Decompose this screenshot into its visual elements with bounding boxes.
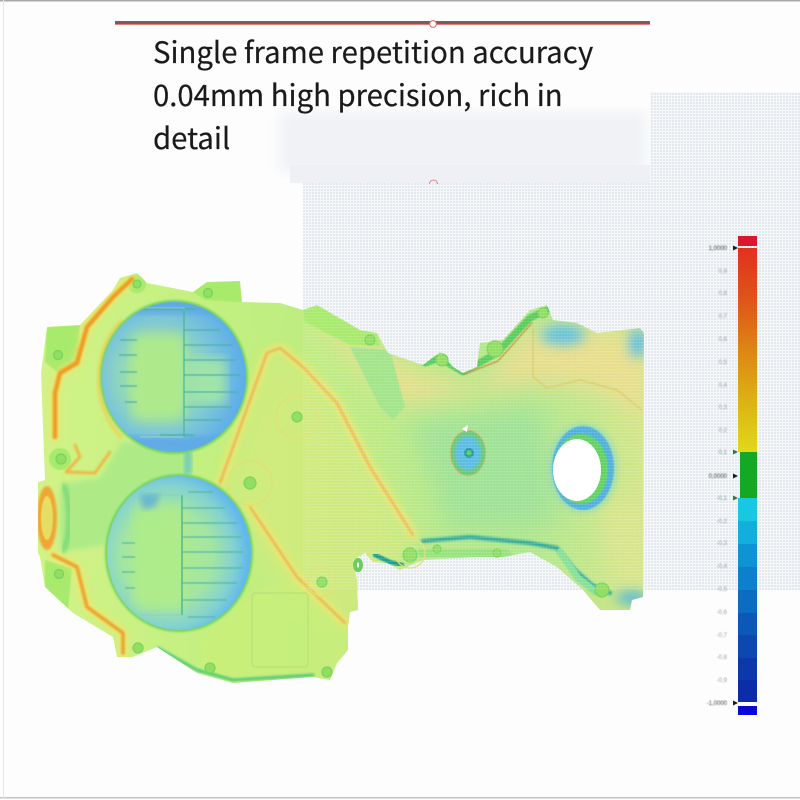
small through hole [355, 560, 361, 570]
legend scale labels: -0,8 [717, 655, 728, 661]
legend scale labels: 0,1 [719, 450, 728, 456]
outlet tube [60, 442, 192, 552]
legend scale labels: -0,4 [717, 564, 728, 570]
legend scale labels: 0,7 [719, 314, 728, 320]
orange ridges [53, 279, 642, 680]
color scale legend [707, 236, 757, 715]
legend scale labels: 0,4 [719, 383, 728, 389]
legend scale labels: -0,3 [717, 541, 728, 547]
background dot grid [303, 92, 800, 590]
legend bar [738, 236, 757, 715]
legend scale labels: 0,8 [719, 291, 728, 297]
small red arc marker [430, 180, 438, 184]
legend scale labels: -0,2 [717, 519, 728, 525]
legend scale labels: -0,9 [717, 678, 728, 684]
legend scale labels: 0,9 [719, 269, 728, 275]
lower circular dome [105, 474, 253, 632]
cam hole with ring [548, 423, 618, 513]
legend scale labels: 0,3 [719, 405, 728, 411]
legend scale labels: 0,5 [719, 360, 728, 366]
center blue boss [450, 425, 486, 476]
lower triangle panel tint [200, 603, 348, 683]
lower rounded panel [252, 593, 308, 667]
scan grid overlay on part [303, 300, 645, 590]
mounting bolts [54, 280, 609, 677]
upper circular dome [99, 296, 248, 454]
warm tint zones [225, 315, 645, 625]
legend scale labels: -0,7 [717, 633, 728, 639]
blue edge blobs [541, 325, 648, 604]
legend scale labels: 0,2 [719, 428, 728, 434]
engine timing cover scan heat map [37, 273, 648, 690]
legend scale labels: -0,1 [717, 496, 728, 502]
legend scale labels: -1,0000 [707, 701, 728, 707]
legend tick markers [733, 246, 738, 706]
green lugs and tabs [45, 275, 405, 610]
bolt washer rings [228, 396, 425, 596]
top accent line [115, 21, 650, 27]
right side edge bands [375, 310, 610, 593]
legend scale labels [707, 246, 728, 707]
legend scale labels: 0,0000 [709, 474, 728, 480]
heading text: Single frame repetition accuracy 0.04mm high precision, rich in detail [153, 30, 593, 158]
legend scale labels: -0,6 [717, 610, 728, 616]
warm halos along ridges [53, 279, 413, 653]
legend scale labels: 0,6 [719, 337, 728, 343]
legend scale labels: -0,5 [717, 587, 728, 593]
legend scale labels: 1,0000 [709, 246, 728, 252]
blurred retouched patch behind heading [280, 92, 800, 183]
